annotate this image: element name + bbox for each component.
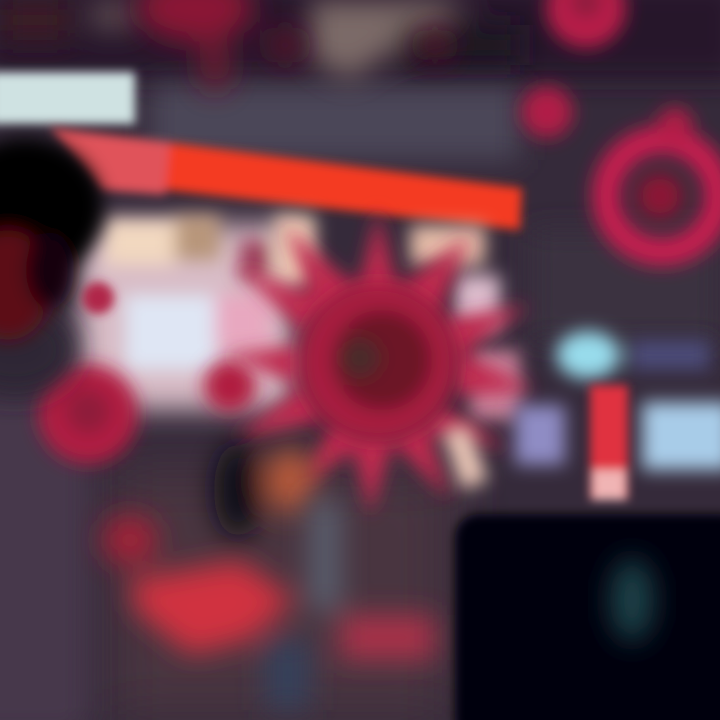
virus: small blob: [521, 86, 573, 138]
virus: top left: [137, 0, 451, 91]
virus: small left blob: [82, 282, 114, 314]
virus: central body: [298, 282, 458, 442]
white banner: [0, 72, 135, 124]
virus: top right ring: [546, 0, 626, 48]
virus: central spikes: [225, 210, 535, 515]
dark screen: [455, 514, 720, 720]
virus: lower left: [38, 364, 138, 464]
screen glow: [610, 558, 654, 642]
silhouette body: [0, 395, 90, 720]
top streaks: [0, 0, 520, 80]
red vertical bar: [590, 385, 628, 500]
dark object: [214, 442, 314, 538]
red lower object: [102, 500, 435, 710]
virus: middle left: [204, 360, 256, 412]
red banner: [50, 128, 522, 230]
pale panel details: [105, 215, 520, 420]
virus: large ring right: [606, 107, 718, 252]
pale highlight: [442, 425, 488, 490]
silhouette neck: [0, 305, 75, 395]
silhouette head: [0, 138, 103, 340]
light blue panels: [515, 331, 720, 470]
pale panel: [78, 225, 293, 410]
